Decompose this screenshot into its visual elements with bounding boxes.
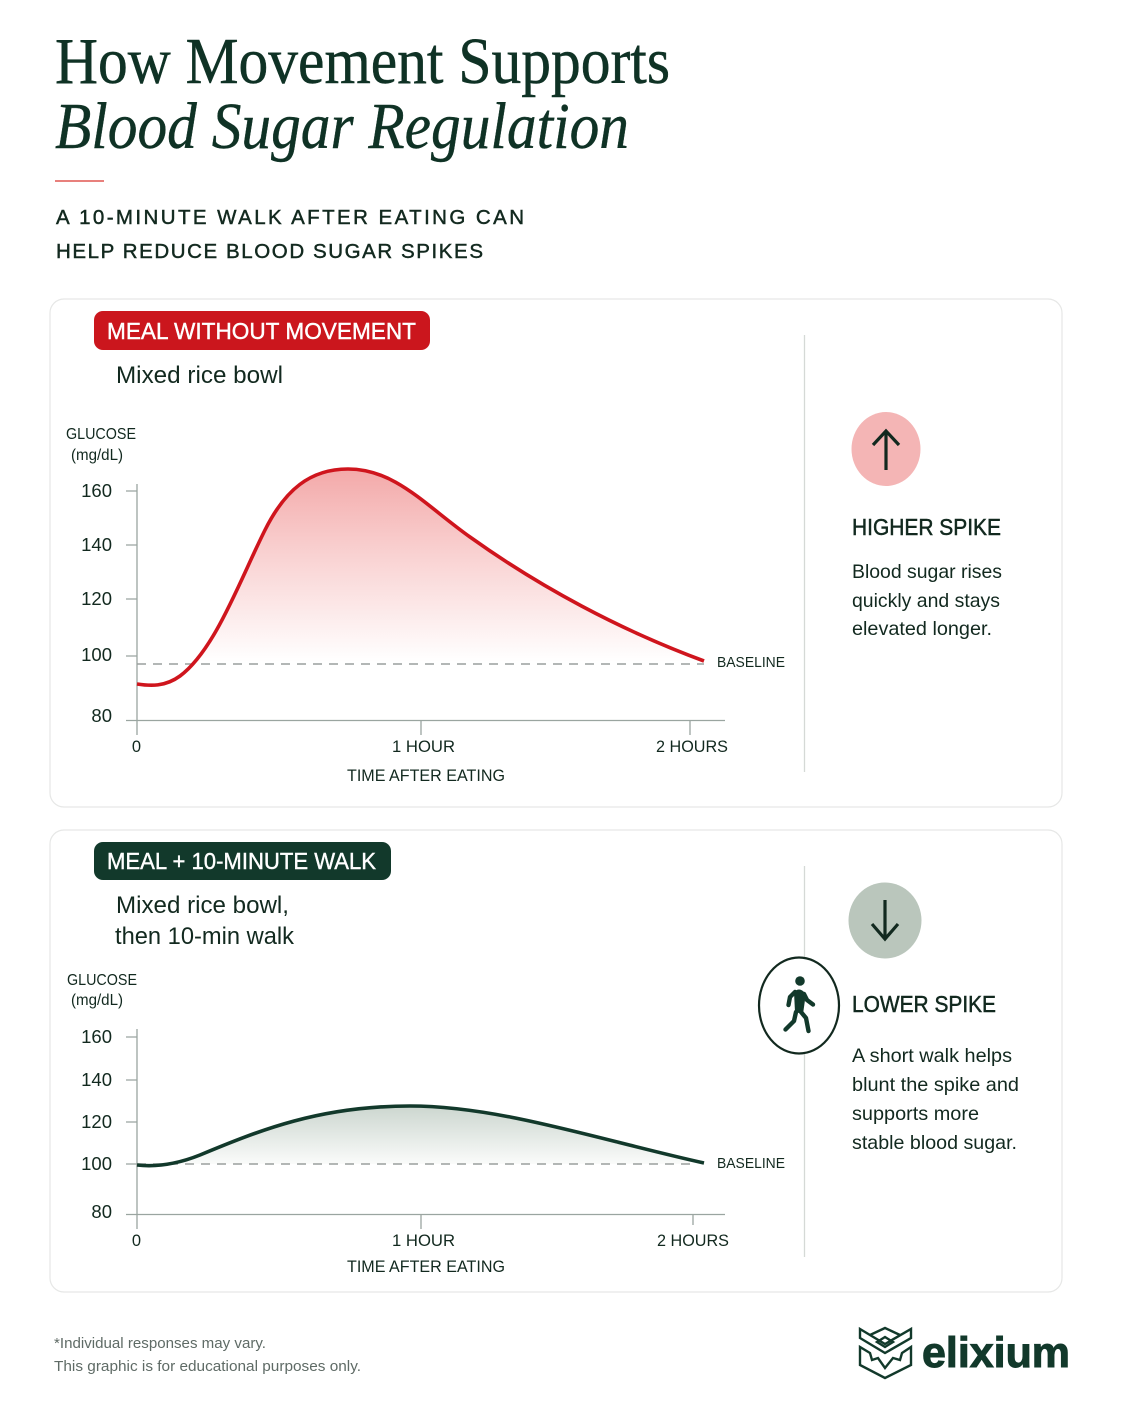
y-axis title: (mg/dL): [71, 447, 123, 464]
title: [55, 25, 670, 163]
logo: elixium: [860, 1328, 1070, 1378]
chart: blunted glucose curve: 140: [81, 1069, 112, 1090]
meal description: [115, 892, 295, 950]
footnote: *Individual responses may vary.: [54, 1336, 266, 1352]
title: How Movement Supports: [55, 25, 670, 98]
y-axis title: [67, 972, 137, 1009]
meal description: then 10-min walk: [115, 923, 295, 950]
higher spike text: elevated longer.: [852, 618, 992, 640]
lower spike text: A short walk helps: [852, 1045, 1012, 1067]
divider: [804, 866, 806, 1257]
footnote: This graphic is for educational purposes only.: [54, 1359, 361, 1375]
chart: high glucose spike: 140: [81, 534, 112, 555]
chart: high glucose spike: 120: [81, 588, 112, 609]
chart: blunted glucose curve: [81, 1026, 785, 1276]
logo: elixium: elixium: [922, 1330, 1070, 1377]
badge: meal without movement: [94, 311, 430, 350]
higher spike text: Blood sugar rises: [852, 561, 1002, 583]
badge: meal without movement: MEAL WITHOUT MOVEMENT: [107, 318, 416, 344]
panel: meal without movement: [50, 299, 1062, 807]
y-axis title: (mg/dL): [71, 992, 123, 1009]
chart: high glucose spike: BASELINE: [717, 654, 785, 671]
accent rule: [55, 180, 104, 182]
chart: high glucose spike: 100: [81, 644, 112, 665]
chart: high glucose spike: 80: [91, 705, 112, 726]
lower spike text: blunt the spike and: [852, 1074, 1019, 1096]
chart: blunted glucose curve: 0: [132, 1232, 141, 1250]
title: Blood Sugar Regulation: [55, 90, 629, 163]
meal description: Mixed rice bowl,: [116, 892, 289, 919]
badge: meal plus walk: [94, 842, 391, 880]
chart: blunted glucose curve: 100: [81, 1153, 112, 1174]
chart: high glucose spike: [81, 469, 785, 785]
higher spike text: HIGHER SPIKE: [852, 514, 1001, 540]
subtitle: [56, 206, 524, 263]
meal description: Mixed rice bowl: [116, 362, 283, 389]
divider: [804, 335, 806, 772]
higher spike text: quickly and stays: [852, 590, 1000, 612]
icon: down arrow: [848, 882, 922, 958]
y-axis title: GLUCOSE: [66, 426, 136, 443]
subtitle: HELP REDUCE BLOOD SUGAR SPIKES: [56, 240, 483, 263]
panel: meal plus walk: [50, 830, 1062, 1292]
lower spike text: LOWER SPIKE: [852, 991, 996, 1017]
lower spike text: stable blood sugar.: [852, 1132, 1017, 1154]
chart: high glucose spike: TIME AFTER EATING: [347, 767, 505, 785]
icon: walking person: [759, 958, 839, 1054]
lower spike text: supports more: [852, 1103, 979, 1125]
higher spike text: [852, 514, 1002, 640]
chart: high glucose spike: 160: [81, 480, 112, 501]
chart: blunted glucose curve: 80: [91, 1201, 112, 1222]
badge: meal plus walk: MEAL + 10-MINUTE WALK: [107, 848, 377, 874]
subtitle: A 10-MINUTE WALK AFTER EATING CAN: [56, 206, 524, 229]
chart: high glucose spike: 0: [132, 738, 141, 756]
chart: blunted glucose curve: 160: [81, 1026, 112, 1047]
chart: blunted glucose curve: 2 HOURS: [657, 1232, 729, 1250]
chart: blunted glucose curve: 1 HOUR: [392, 1232, 455, 1250]
chart: blunted glucose curve: BASELINE: [717, 1155, 785, 1172]
lower spike text: [852, 991, 1019, 1154]
chart: high glucose spike: 2 HOURS: [656, 738, 728, 756]
y-axis title: [66, 426, 136, 464]
icon: up arrow: [852, 412, 920, 486]
footnote: [54, 1336, 361, 1375]
y-axis title: GLUCOSE: [67, 972, 137, 989]
chart: blunted glucose curve: TIME AFTER EATING: [347, 1258, 505, 1276]
chart: blunted glucose curve: 120: [81, 1111, 112, 1132]
chart: high glucose spike: 1 HOUR: [392, 738, 455, 756]
